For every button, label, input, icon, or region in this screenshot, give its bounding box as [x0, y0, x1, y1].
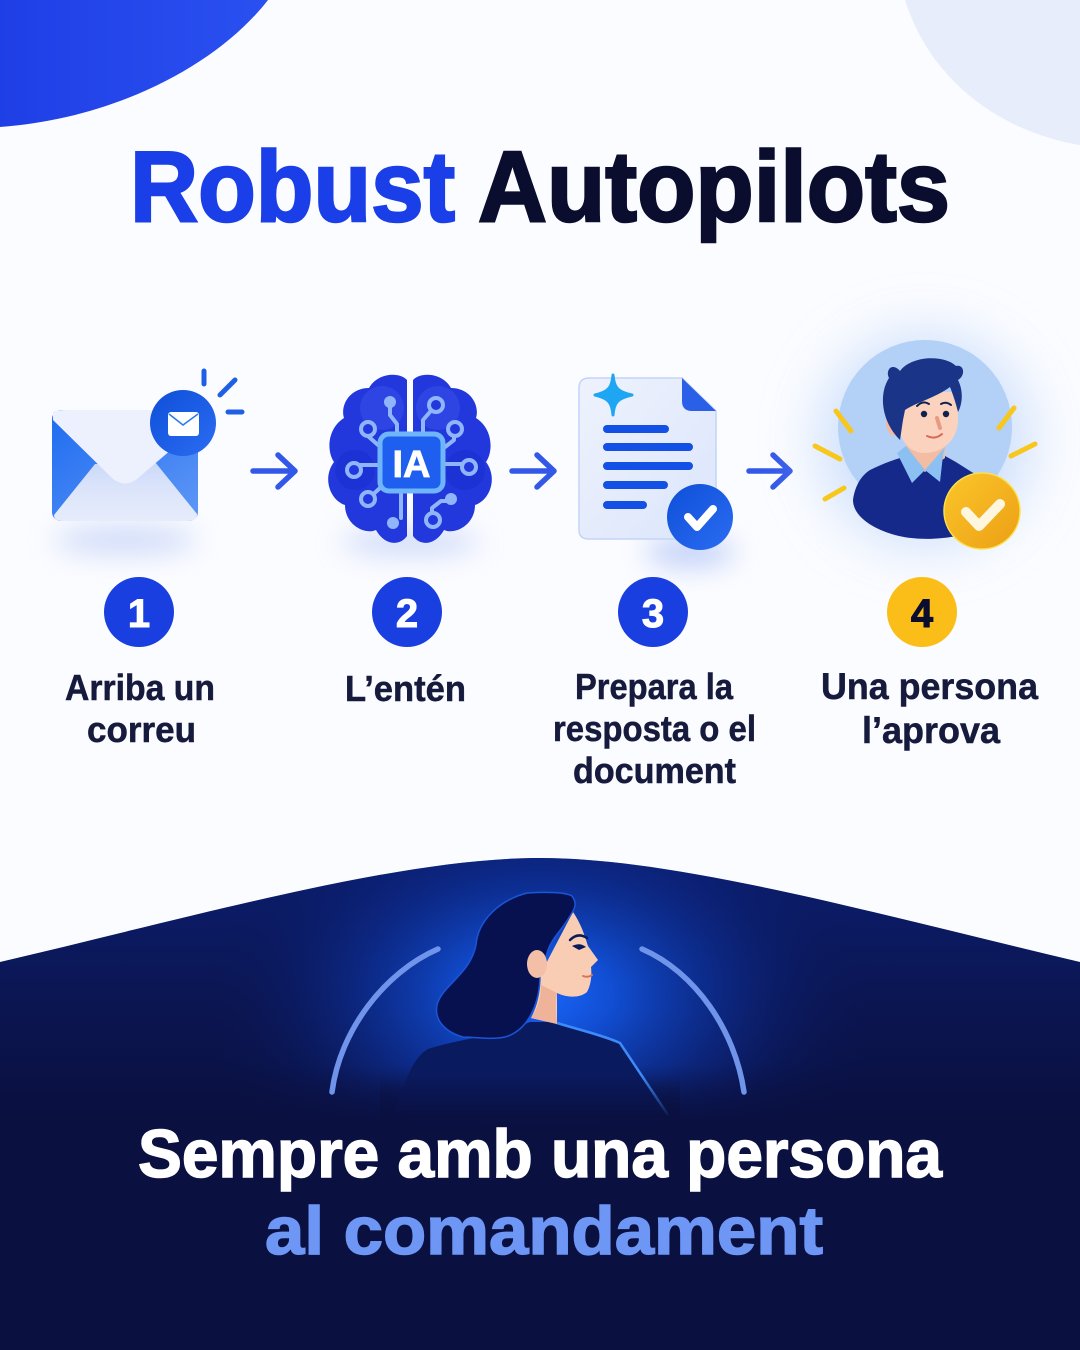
icon: AI brain [328, 375, 492, 554]
step 3 label: document [573, 750, 736, 791]
title [130, 131, 950, 243]
title: Robust [130, 131, 455, 243]
arrow: step 1 to 2 [253, 455, 295, 487]
decoration: left arc [332, 949, 438, 1092]
bottom dark panel [0, 858, 1080, 1350]
icon: AI brain: IA [392, 444, 430, 486]
title: Autopilots [478, 131, 950, 243]
step 4 label: Una persona [821, 666, 1038, 707]
step 3 label: Prepara la [575, 666, 734, 707]
decoration: top-left blue corner [0, 0, 268, 127]
bottom headline [138, 1116, 943, 1269]
bottom headline: al comandament [265, 1193, 823, 1269]
illustration: woman in profile [393, 892, 668, 1115]
step 4 label [821, 666, 1038, 751]
arrow: step 3 to 4 [749, 455, 790, 487]
step 3 label: resposta o el [553, 708, 756, 749]
step 3 number: 3 [642, 592, 664, 636]
icon: document with check [579, 375, 735, 566]
step 1 label [65, 667, 215, 750]
bottom headline: Sempre amb una persona [138, 1116, 943, 1192]
step 2 label: L’entén [345, 668, 466, 709]
step 3 label [553, 666, 756, 791]
step 4 number: 4 [911, 592, 934, 636]
step 1 number [104, 577, 174, 647]
step 1 number: 1 [128, 592, 150, 636]
step 2 number [372, 577, 442, 647]
step 1 label: Arriba un [65, 667, 215, 708]
step 4 label: l’aprova [862, 710, 1000, 751]
icon: approving person with gold check [815, 335, 1035, 549]
step 2 number: 2 [396, 592, 418, 636]
icon: envelope with mail badge [52, 371, 242, 554]
arrow: step 2 to 3 [512, 455, 554, 487]
step 3 number [618, 577, 688, 647]
step 1 label: correu [87, 709, 196, 750]
decoration: top-right pale corner [905, 0, 1080, 145]
step 4 number [887, 577, 957, 647]
decoration: right arc [642, 949, 744, 1092]
